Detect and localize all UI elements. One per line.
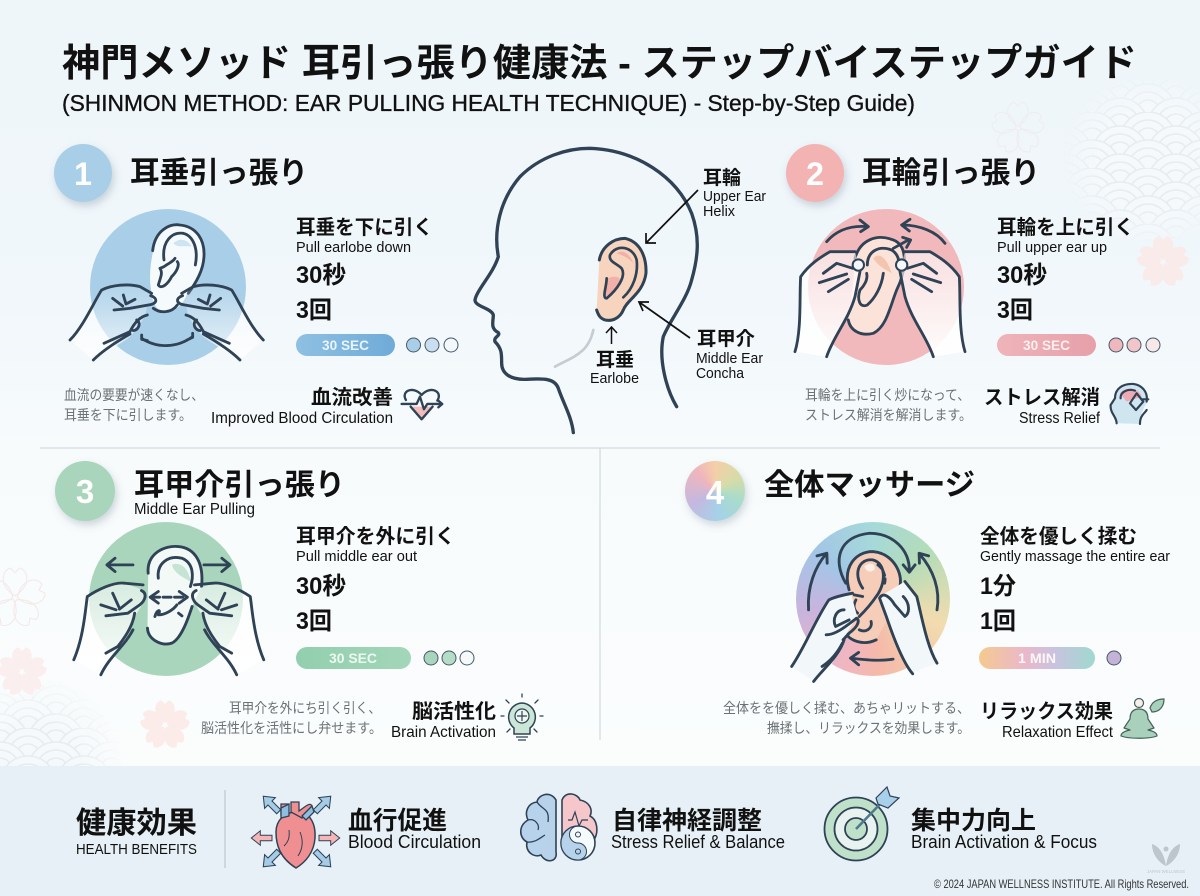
benefit: autonomic balance: 自律神経調整 bbox=[612, 807, 762, 835]
logo watermark: JAPAN WELLNESS bbox=[1147, 869, 1185, 874]
right hand bbox=[880, 582, 937, 673]
benefit: blood circulation: 血行促進 bbox=[348, 807, 447, 835]
step 2 action: Pull upper ear up bbox=[997, 240, 1107, 256]
panel: step 1 earlobe bbox=[54, 144, 458, 427]
step 4 illustration disc bbox=[796, 522, 950, 676]
step 1 repeat dots bbox=[406, 338, 458, 352]
step 1 illustration: hands pulling earlobe bbox=[70, 209, 263, 365]
step 3 description bbox=[201, 700, 382, 736]
step 3 repeat dots bbox=[424, 651, 474, 665]
benefit: blood circulation bbox=[348, 807, 481, 852]
arrow to upper ear bbox=[646, 190, 698, 243]
step 4 badge number: 4 bbox=[706, 474, 725, 511]
arrow to middle ear bbox=[639, 302, 690, 338]
step 3 action: 30秒 bbox=[296, 573, 346, 600]
step 3 timer pill bbox=[296, 647, 411, 669]
step 1 badge bbox=[54, 144, 112, 202]
sakura blossom right bbox=[1135, 236, 1191, 289]
arrow to earlobe bbox=[606, 327, 617, 344]
sakura outline left bbox=[0, 568, 47, 629]
step 3 badge: 3 bbox=[76, 473, 94, 510]
step 1 action: 耳垂を下に引く bbox=[296, 216, 433, 239]
step 4 timer pill fill bbox=[979, 647, 1095, 669]
step 4 action: 1分 bbox=[980, 573, 1016, 600]
label: earlobe: 耳垂 bbox=[596, 349, 634, 371]
step 2 benefit label: Stress Relief bbox=[1019, 410, 1100, 427]
step 2 benefit label: ストレス解消 bbox=[984, 386, 1100, 409]
step 1 heading: 耳垂引っ張り bbox=[130, 157, 308, 190]
step 4 illustration: hands massaging ear bbox=[792, 533, 938, 681]
step 3 benefit label: 脳活性化 bbox=[412, 700, 496, 723]
step 4 action: Gently massage the entire ear bbox=[980, 549, 1170, 565]
step 2 benefit label bbox=[984, 386, 1100, 427]
step 3 heading bbox=[134, 469, 345, 518]
step 4 benefit label bbox=[980, 700, 1114, 741]
label: upper ear helix: 耳輪 bbox=[703, 167, 741, 189]
left hand bbox=[792, 593, 858, 681]
step 3 description: 脳活性化を活性にし弁せます。 bbox=[201, 720, 382, 736]
footer band background bbox=[0, 766, 1200, 896]
step 4 description: 全体をを優しく揉む、あちゃリットする、 bbox=[723, 700, 970, 716]
icon: head with relief bbox=[1111, 384, 1148, 424]
step 3 badge bbox=[55, 461, 115, 521]
step 2 description: ストレス解消を解消します。 bbox=[805, 407, 972, 423]
step 3 action: Pull middle ear out bbox=[296, 549, 417, 565]
label: middle ear concha bbox=[696, 328, 763, 382]
step 4 repeat dot bbox=[1107, 651, 1121, 665]
sakura outline top right bbox=[990, 102, 1046, 155]
benefit: focus: 集中力向上 bbox=[911, 807, 1036, 835]
sakura blossom lower left bbox=[0, 647, 49, 698]
icon: meditating figure with leaf bbox=[1121, 698, 1164, 738]
step 3 description: 耳甲介を外にち引く引く、 bbox=[229, 700, 381, 716]
benefit: autonomic balance: Stress Relief & Balance bbox=[611, 831, 785, 852]
step 4 action bbox=[980, 525, 1170, 635]
step 2 action: 30秒 bbox=[997, 262, 1047, 289]
step 1 badge: 1 bbox=[74, 156, 92, 192]
step 4 description: 撫揉し、リラックスを効果します。 bbox=[767, 720, 970, 736]
step 2 timer pill bbox=[997, 334, 1096, 356]
step 1 benefit label bbox=[211, 386, 393, 427]
step 2 action: 3回 bbox=[997, 297, 1033, 324]
step 1 action: Pull earlobe down bbox=[296, 240, 411, 256]
panel: step 2 upper ear bbox=[786, 144, 1160, 427]
head profile outline bbox=[475, 148, 697, 433]
step 3 illustration: hands pulling middle ear bbox=[74, 522, 264, 676]
step 1 description bbox=[64, 387, 204, 423]
step 2 action: 耳輪を上に引く bbox=[997, 216, 1134, 239]
footer heading: HEALTH BENEFITS bbox=[76, 841, 197, 858]
label: upper ear helix: Upper Ear bbox=[703, 188, 766, 205]
step 3 action: 3回 bbox=[296, 608, 332, 635]
step 3 timer pill: 30 SEC bbox=[329, 651, 377, 666]
logo watermark bbox=[1147, 844, 1185, 874]
icon: target with arrow bbox=[824, 787, 899, 860]
benefit: focus: Brain Activation & Focus bbox=[911, 831, 1097, 852]
step 4 action: 全体を優しく揉む bbox=[980, 525, 1137, 548]
panel: central head diagram bbox=[475, 148, 766, 433]
step 2 badge: 2 bbox=[806, 156, 824, 192]
icon: light bulb with brain bbox=[501, 694, 543, 740]
sakura blossom lower centre left bbox=[138, 700, 192, 751]
panel: step 4 full massage bbox=[706, 469, 1170, 741]
step 1 description: 血流の要要が速くなし、 bbox=[64, 387, 204, 403]
step 2 description bbox=[805, 387, 972, 423]
step 1 description: 耳垂を下に引します。 bbox=[64, 407, 192, 423]
step 3 benefit label: Brain Activation bbox=[391, 724, 496, 741]
label: upper ear helix bbox=[703, 167, 766, 220]
step 3 heading: Middle Ear Pulling bbox=[134, 501, 255, 518]
step 4 description bbox=[723, 700, 970, 736]
title: 神門メソッド 耳引っ張り健康法 - ステップバイステップガイド bbox=[62, 43, 1137, 85]
step 2 timer pill: 30 SEC bbox=[1023, 338, 1070, 353]
subtitle: (SHINMON METHOD: EAR PULLING HEALTH TECHNIQUE) - Step-by-Step Guide) bbox=[62, 90, 915, 116]
step 4 heading: 全体マッサージ bbox=[764, 469, 975, 502]
icon: heart with arrows bbox=[251, 791, 340, 872]
step 2 repeat dots bbox=[1109, 338, 1160, 352]
step 1 benefit label: Improved Blood Circulation bbox=[211, 410, 393, 427]
step 3 action: 耳甲介を外に引く bbox=[296, 525, 455, 548]
step 4 benefit label: Relaxation Effect bbox=[1002, 724, 1114, 741]
label: middle ear concha: Middle Ear bbox=[696, 350, 763, 367]
step 1 action: 30秒 bbox=[296, 262, 346, 289]
step 2 badge bbox=[786, 144, 844, 202]
benefit: autonomic balance bbox=[611, 807, 785, 852]
step 3 action bbox=[296, 525, 455, 635]
step 1 action bbox=[296, 216, 433, 324]
step 3 benefit label bbox=[391, 700, 496, 741]
step 2 heading: 耳輪引っ張り bbox=[862, 157, 1040, 190]
step 4 benefit label: リラックス効果 bbox=[980, 700, 1113, 723]
step 4 timer label: 1 MIN bbox=[1018, 651, 1056, 666]
step 2 description: 耳輪を上に引く炒になって、 bbox=[805, 387, 970, 403]
panel: step 3 middle ear bbox=[55, 461, 543, 741]
step 1 timer pill: 30 SEC bbox=[322, 338, 369, 353]
seigaiha wave pattern bottom left bbox=[0, 695, 107, 766]
panel: health benefits footer bbox=[76, 787, 1189, 891]
step 4 action: 1回 bbox=[980, 608, 1016, 635]
label: earlobe: Earlobe bbox=[590, 370, 639, 387]
step 2 action bbox=[997, 216, 1134, 324]
benefit: blood circulation: Blood Circulation bbox=[348, 831, 481, 852]
footer heading bbox=[76, 807, 197, 858]
step 4 badge disc bbox=[685, 461, 745, 521]
label: earlobe bbox=[590, 349, 639, 387]
step 3 heading: 耳甲介引っ張り bbox=[134, 469, 345, 502]
ear diagram bbox=[597, 238, 646, 320]
step 1 timer pill bbox=[296, 334, 395, 356]
dividers bbox=[40, 448, 1160, 740]
label: upper ear helix: Helix bbox=[703, 203, 735, 220]
label: middle ear concha: Concha bbox=[696, 365, 745, 382]
benefit: focus bbox=[911, 807, 1097, 852]
step 1 action: 3回 bbox=[296, 297, 332, 324]
icon: heart with pulse bbox=[402, 390, 442, 419]
seigaiha wave pattern top right bbox=[1090, 100, 1200, 220]
step 2 illustration: hands pulling upper ear bbox=[795, 209, 965, 365]
icon: brain and yin yang bbox=[521, 794, 597, 861]
step 1 benefit label: 血流改善 bbox=[311, 386, 393, 409]
footer heading: 健康効果 bbox=[76, 807, 197, 840]
label: middle ear concha: 耳甲介 bbox=[697, 328, 755, 350]
